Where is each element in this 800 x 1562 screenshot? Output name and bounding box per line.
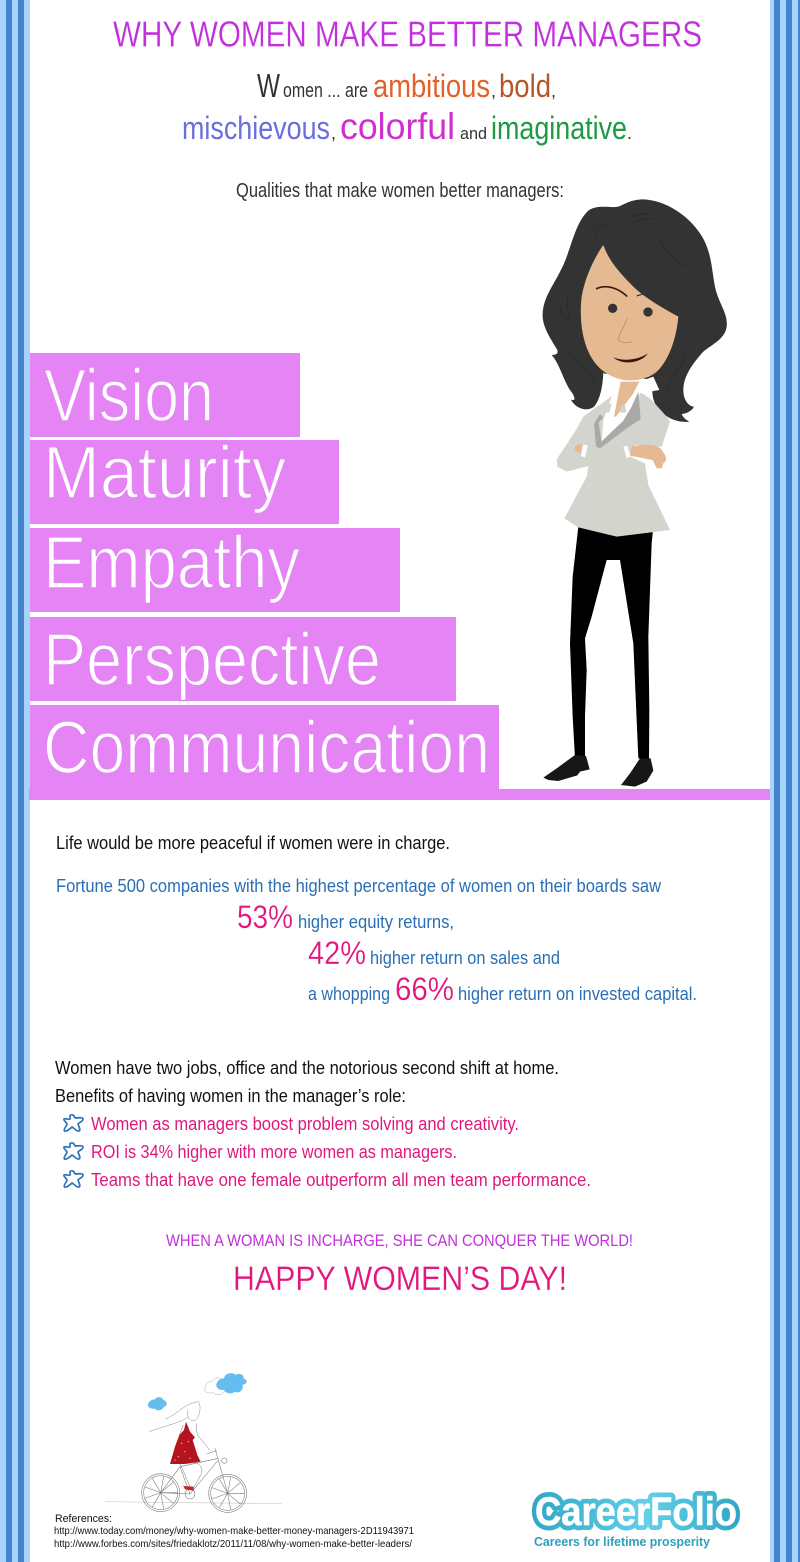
bar: communication: Communication xyxy=(43,706,490,789)
neck and shirt xyxy=(602,373,659,443)
intro text: line two: and xyxy=(460,124,487,143)
stat: 53 percent: 53% xyxy=(237,899,293,935)
stat: 53 percent xyxy=(237,899,454,935)
stat: 66 percent: 66% xyxy=(395,971,454,1007)
logo: careerfolio xyxy=(534,1490,737,1549)
bar: perspective: Perspective xyxy=(43,618,381,701)
references: References: xyxy=(55,1513,112,1525)
panel: qualities staircase xyxy=(29,353,770,800)
bullet two: ROI is 34% higher with more women as managers. xyxy=(91,1142,457,1162)
subheading: qualities: Qualities that make women better managers: xyxy=(236,180,564,202)
intro text: line two: . xyxy=(627,123,632,143)
stat: 66 percent xyxy=(308,971,697,1007)
text: fortune 500 intro: Fortune 500 companies with the highest percentage of women on their boards saw xyxy=(56,876,662,896)
stat: 66 percent: higher return on invested capital. xyxy=(458,984,697,1004)
ground line xyxy=(105,1502,282,1504)
intro text: line two xyxy=(182,106,632,147)
stat: 42 percent xyxy=(308,935,560,971)
legs and shoes xyxy=(543,527,653,787)
bar: vision: Vision xyxy=(44,354,214,437)
floor line xyxy=(29,789,770,800)
illustration: businesswoman xyxy=(543,199,727,787)
intro text: line two: , xyxy=(331,123,336,143)
hands and cuffs xyxy=(575,444,666,468)
intro text: line one: , xyxy=(551,81,556,101)
intro text: line one: W xyxy=(257,67,281,104)
jacket xyxy=(557,392,670,537)
stat: 42 percent: higher return on sales and xyxy=(370,948,560,968)
closing slogan: WHEN A WOMAN IS INCHARGE, SHE CAN CONQUER THE WORLD! xyxy=(166,1231,633,1250)
stat: 42 percent: 42% xyxy=(308,935,366,971)
hair strands xyxy=(560,214,692,390)
face xyxy=(581,245,678,380)
intro text: line two: mischievous xyxy=(182,110,330,146)
shirt shading xyxy=(606,403,626,413)
rider xyxy=(149,1402,210,1491)
intro text: line one: bold xyxy=(499,68,551,104)
intro text: line one xyxy=(257,67,556,104)
hair xyxy=(543,199,727,422)
bar: empathy: Empathy xyxy=(43,521,300,604)
text: two jobs: Women have two jobs, office and the notorious second shift at home. xyxy=(55,1058,559,1078)
stat: 66 percent: a whopping xyxy=(308,984,390,1004)
list: benefits xyxy=(64,1114,591,1190)
stat: 53 percent: higher equity returns, xyxy=(298,912,454,932)
logo: careerfolio: Careers for lifetime prosperity xyxy=(534,1534,711,1549)
intro text: line two: colorful xyxy=(340,106,455,147)
lapels xyxy=(594,392,641,448)
torso, head and hair xyxy=(543,199,727,537)
illustration: woman on a bicycle xyxy=(105,1373,282,1512)
text: peace statement: Life would be more peaceful if women were in charge. xyxy=(56,833,450,853)
intro text: line one: ambitious xyxy=(373,68,490,104)
eyebrows, eyes, nose, mouth xyxy=(597,287,627,296)
intro text: line two: imaginative xyxy=(491,110,627,146)
clouds xyxy=(148,1373,247,1410)
bullet one: Women as managers boost problem solving and creativity. xyxy=(91,1114,519,1134)
logo: careerfolio: CareerFolio xyxy=(535,1490,737,1534)
wheels and frame xyxy=(142,1448,247,1512)
references: http://www.forbes.com/sites/friedaklotz/2011/11/08/why-women-make-better-leaders/ xyxy=(54,1538,412,1550)
bar: maturity: Maturity xyxy=(43,431,286,514)
text: benefits heading: Benefits of having women in the manager’s role: xyxy=(55,1086,406,1106)
references: http://www.today.com/money/why-women-make-better-money-managers-2D11943971 xyxy=(54,1525,414,1537)
logo: careerfolio: CareerFolio xyxy=(535,1490,737,1534)
closing heading: HAPPY WOMEN’S DAY! xyxy=(233,1260,567,1298)
intro text: line one: omen ... are xyxy=(283,80,368,102)
bullet three: Teams that have one female outperform all men team performance. xyxy=(91,1170,591,1190)
intro text: line one: , xyxy=(491,81,496,101)
references xyxy=(54,1513,414,1550)
